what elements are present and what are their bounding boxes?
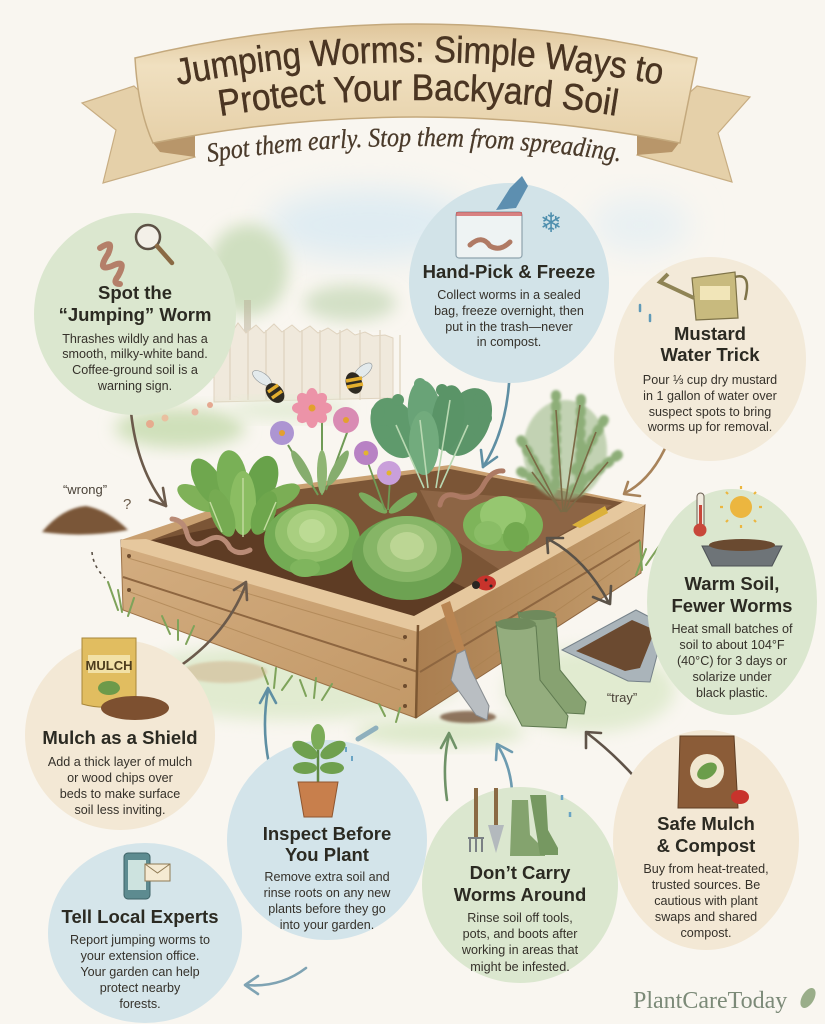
icon: worm and magnifier — [100, 225, 172, 284]
panel: safe mulch and compost: trusted sources. Be — [652, 878, 760, 892]
banner ribbon with title — [80, 23, 751, 184]
panel: safe mulch and compost: & Compost — [657, 835, 755, 856]
panel: don't carry worms around: Worms Around — [454, 884, 586, 905]
panel: tell local experts: your extension office. — [81, 949, 199, 963]
panel: warm soil: soil to about 104°F — [679, 638, 785, 652]
pink flower — [292, 388, 332, 428]
top rim — [121, 501, 645, 632]
left ribbon tail — [82, 86, 195, 183]
panel: inspect before you plant — [227, 724, 427, 940]
panel: inspect before you plant: Inspect Before — [263, 823, 391, 844]
arrow: inspect to tell — [245, 968, 306, 994]
arrow: carry to bed blue — [496, 744, 512, 790]
spinach plant — [173, 448, 304, 540]
panel: hand-pick and freeze: Hand-Pick & Freeze — [423, 261, 595, 282]
panel: mustard water trick: Pour ⅓ cup dry mustard — [643, 373, 777, 387]
yellow tool on bed — [572, 506, 608, 528]
panel: mustard water trick: in 1 gallon of water over — [643, 389, 777, 403]
panel: safe mulch and compost: cautious with plant — [654, 894, 758, 908]
panel: tell local experts: Report jumping worms to — [70, 933, 210, 947]
icon: bag with worms and glove: ❄ — [540, 208, 562, 239]
panel: spot the jumping worm: “Jumping” Worm — [59, 304, 211, 325]
ribbon folds — [153, 135, 679, 157]
icon: potted plant — [289, 724, 376, 817]
panel: spot the jumping worm: warning sign. — [97, 379, 172, 393]
icon: thermometer, sun, tray — [694, 486, 782, 566]
right wall — [416, 505, 645, 718]
panel: hand-pick and freeze: bag, freeze overnight, then — [434, 304, 584, 318]
panel: warm soil — [647, 486, 817, 715]
panel: don't carry worms around: Rinse soil off tools, — [467, 911, 573, 925]
cabbage head — [352, 516, 462, 600]
worm in soil — [440, 471, 503, 505]
panel: hand-pick and freeze: Collect worms in a sealed — [437, 288, 581, 302]
panel: spot the jumping worm — [34, 213, 236, 415]
panel: mulch as a shield: beds to make surface — [60, 787, 180, 801]
ladybug — [472, 576, 496, 590]
icon: watering can — [640, 272, 747, 321]
arrow: inspect to bed — [260, 688, 276, 780]
panel: mustard water trick: worms up for removal. — [647, 420, 772, 434]
panel: tell local experts: protect nearby — [100, 981, 181, 995]
panel: mulch as a shield: or wood chips over — [67, 771, 173, 785]
metal tray — [562, 610, 665, 682]
panel: spot the jumping worm: smooth, milky-white band. — [62, 347, 208, 361]
panel: tell local experts — [48, 843, 242, 1023]
panel: inspect before you plant: into your garden. — [280, 918, 374, 932]
panel: warm soil: Warm Soil, — [685, 573, 779, 594]
panel: warm soil: Fewer Worms — [672, 595, 792, 616]
panel: hand-pick and freeze — [409, 176, 609, 383]
panel: warm soil: solarize under — [692, 670, 772, 684]
panel: mulch as a shield — [25, 638, 215, 830]
panel: hand-pick and freeze: put in the trash—never — [445, 320, 573, 334]
panel: safe mulch and compost: Safe Mulch — [657, 813, 755, 834]
panel: mustard water trick: suspect spots to bring — [649, 405, 771, 419]
panel: warm soil: Heat small batches of — [671, 622, 793, 636]
panel: inspect before you plant: rinse roots on any new — [264, 886, 391, 900]
subtitle: Spot them early. Stop them from spreading. — [208, 127, 619, 166]
worm on left of bed — [172, 519, 250, 553]
bee left — [250, 368, 288, 407]
panel: don't carry worms around — [422, 787, 618, 983]
wrong soil pile: ? — [123, 496, 131, 513]
bee right — [343, 360, 375, 396]
right ribbon tail — [637, 86, 750, 182]
arrow: mulch to bed — [166, 582, 247, 675]
arrow: mustard to bed — [624, 432, 672, 496]
flowers — [270, 388, 420, 517]
ribbon main panel — [135, 24, 697, 143]
panel: mustard water trick: Mustard — [674, 323, 746, 344]
panel: hand-pick and freeze: in compost. — [477, 335, 541, 349]
kale plant — [361, 378, 502, 488]
panel: spot the jumping worm: Coffee-ground soil is a — [72, 363, 198, 377]
panel: tell local experts: Tell Local Experts — [62, 906, 218, 927]
icon: fork, trowel and boots — [468, 788, 570, 856]
grass tufts — [108, 542, 660, 722]
background garden scene — [115, 189, 690, 746]
front wall — [121, 540, 418, 718]
panel: mustard water trick — [614, 257, 806, 461]
title: Jumping Worms: Simple Ways to — [177, 36, 662, 84]
title: Protect Your Backyard Soil — [218, 74, 618, 116]
title — [177, 36, 662, 116]
soil — [121, 465, 645, 625]
arrow: warm soil double — [547, 538, 611, 604]
panel: warm soil: (40°C) for 3 days or — [677, 654, 787, 668]
panel: safe mulch and compost: swaps and shared — [655, 910, 757, 924]
icon: bag with worms and glove — [456, 176, 562, 258]
wrong soil pile — [42, 482, 131, 578]
wrong soil pile: “wrong” — [63, 482, 107, 497]
panel: inspect before you plant: You Plant — [285, 844, 369, 865]
arrow: carry to bed green — [441, 733, 456, 800]
panel: safe mulch and compost: compost. — [680, 926, 732, 940]
raised garden bed — [108, 465, 660, 723]
bush — [515, 395, 618, 512]
icon: mulch bag — [82, 638, 169, 720]
icon: mulch bag: MULCH — [86, 658, 132, 673]
arrow: safe mulch to bed — [586, 732, 650, 795]
panel: don't carry worms around: Don’t Carry — [470, 862, 571, 883]
panel: inspect before you plant: Remove extra soil and — [264, 870, 390, 884]
panel: mulch as a shield: Mulch as a Shield — [42, 727, 198, 748]
panel: safe mulch and compost — [613, 730, 799, 950]
label: tray: “tray” — [607, 690, 637, 705]
panel: don't carry worms around: working in areas that — [461, 943, 579, 957]
panel: safe mulch and compost: Buy from heat-treated, — [643, 862, 769, 876]
panel: mustard water trick: Water Trick — [660, 344, 760, 365]
logo: PlantCareToday: PlantCareToday — [633, 988, 787, 1014]
icon: compost bag — [678, 736, 749, 808]
icon: phone and envelope — [124, 853, 170, 899]
small lettuce — [463, 496, 543, 552]
panel: inspect before you plant: plants before they go — [268, 902, 386, 916]
panel: spot the jumping worm: Thrashes wildly and has a — [62, 332, 208, 346]
panel: tell local experts: forests. — [119, 997, 161, 1011]
panel: mulch as a shield: soil less inviting. — [74, 803, 166, 817]
panel: don't carry worms around: might be infested. — [470, 960, 570, 974]
rubber boots — [496, 610, 586, 728]
panel: tell local experts: Your garden can help — [80, 965, 200, 979]
panel: spot the jumping worm: Spot the — [98, 282, 172, 303]
lettuce head — [264, 504, 360, 577]
panel: warm soil: black plastic. — [696, 686, 768, 700]
arrow: spot to bed — [131, 412, 166, 506]
arrow: hand-pick to bed — [481, 360, 510, 467]
panel: mulch as a shield: Add a thick layer of mulch — [48, 755, 192, 769]
panel: don't carry worms around: pots, and boots after — [463, 927, 577, 941]
trowel — [441, 601, 489, 720]
